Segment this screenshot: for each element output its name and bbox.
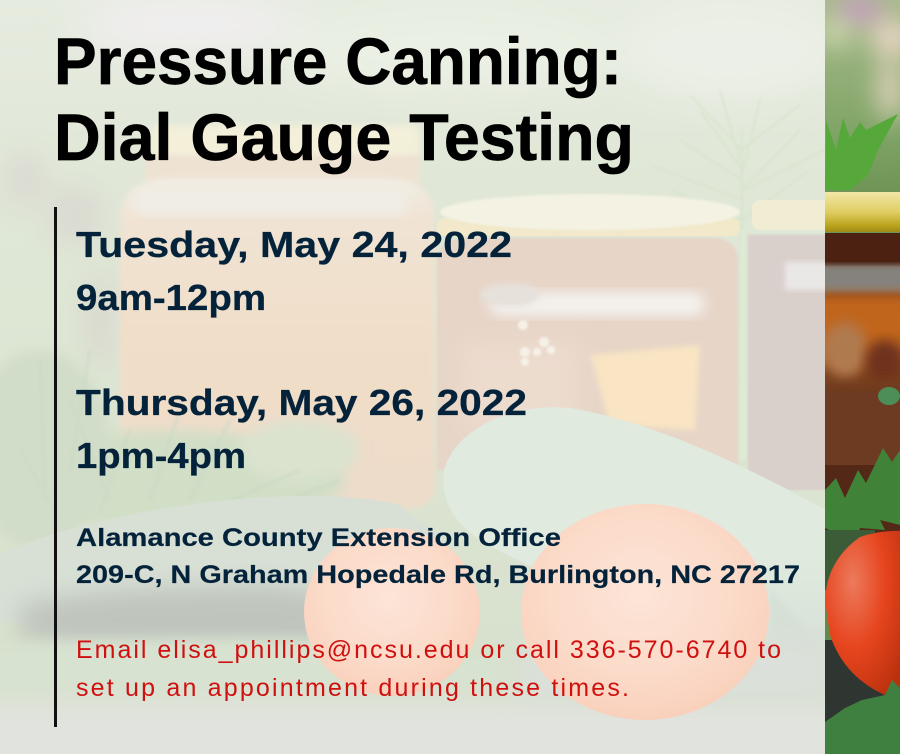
contact call to action xyxy=(76,636,781,702)
date and time: Thursday: 1pm-4pm xyxy=(76,435,246,476)
lavender sprigs xyxy=(3,152,118,370)
leafy herbs, left xyxy=(0,350,360,550)
ground xyxy=(0,702,840,754)
tomatoes xyxy=(304,528,480,696)
tomato xyxy=(825,640,900,754)
parsley xyxy=(825,448,900,552)
date and time: Tuesday: 9am-12pm xyxy=(76,277,266,318)
date and time: Thursday: Thursday, May 26, 2022 xyxy=(76,382,527,423)
uncovered photo strip at right xyxy=(800,0,900,754)
date and time: Thursday xyxy=(76,382,527,476)
foreground greens xyxy=(0,638,510,706)
left zucchini xyxy=(0,496,450,655)
parsley sprig xyxy=(826,114,898,190)
date and time: Tuesday: Tuesday, May 24, 2022 xyxy=(76,224,512,265)
jar lid xyxy=(825,192,900,232)
jar contents xyxy=(825,233,900,545)
location: Alamance County Extension Office xyxy=(76,524,561,552)
dill fronds xyxy=(650,90,825,460)
jar 1 xyxy=(120,125,435,510)
title: Dial Gauge Testing xyxy=(54,100,634,174)
contact call to action: set up an appointment during these times. xyxy=(76,674,629,702)
title: Pressure Canning: xyxy=(54,24,622,98)
large zucchini xyxy=(443,407,830,650)
jar 3 (under panel) xyxy=(748,200,832,490)
title xyxy=(54,24,634,174)
stem between jars xyxy=(740,230,746,460)
vertical rule xyxy=(54,207,57,727)
zucchini stem end xyxy=(770,590,825,660)
jar 2 xyxy=(437,194,740,470)
date and time: Tuesday xyxy=(76,224,512,318)
contact call to action: Email elisa_phillips@ncsu.edu or call 336-570-6740 to xyxy=(76,636,781,664)
location xyxy=(76,524,800,589)
location: 209-C, N Graham Hopedale Rd, Burlington, NC 27217 xyxy=(76,561,800,589)
